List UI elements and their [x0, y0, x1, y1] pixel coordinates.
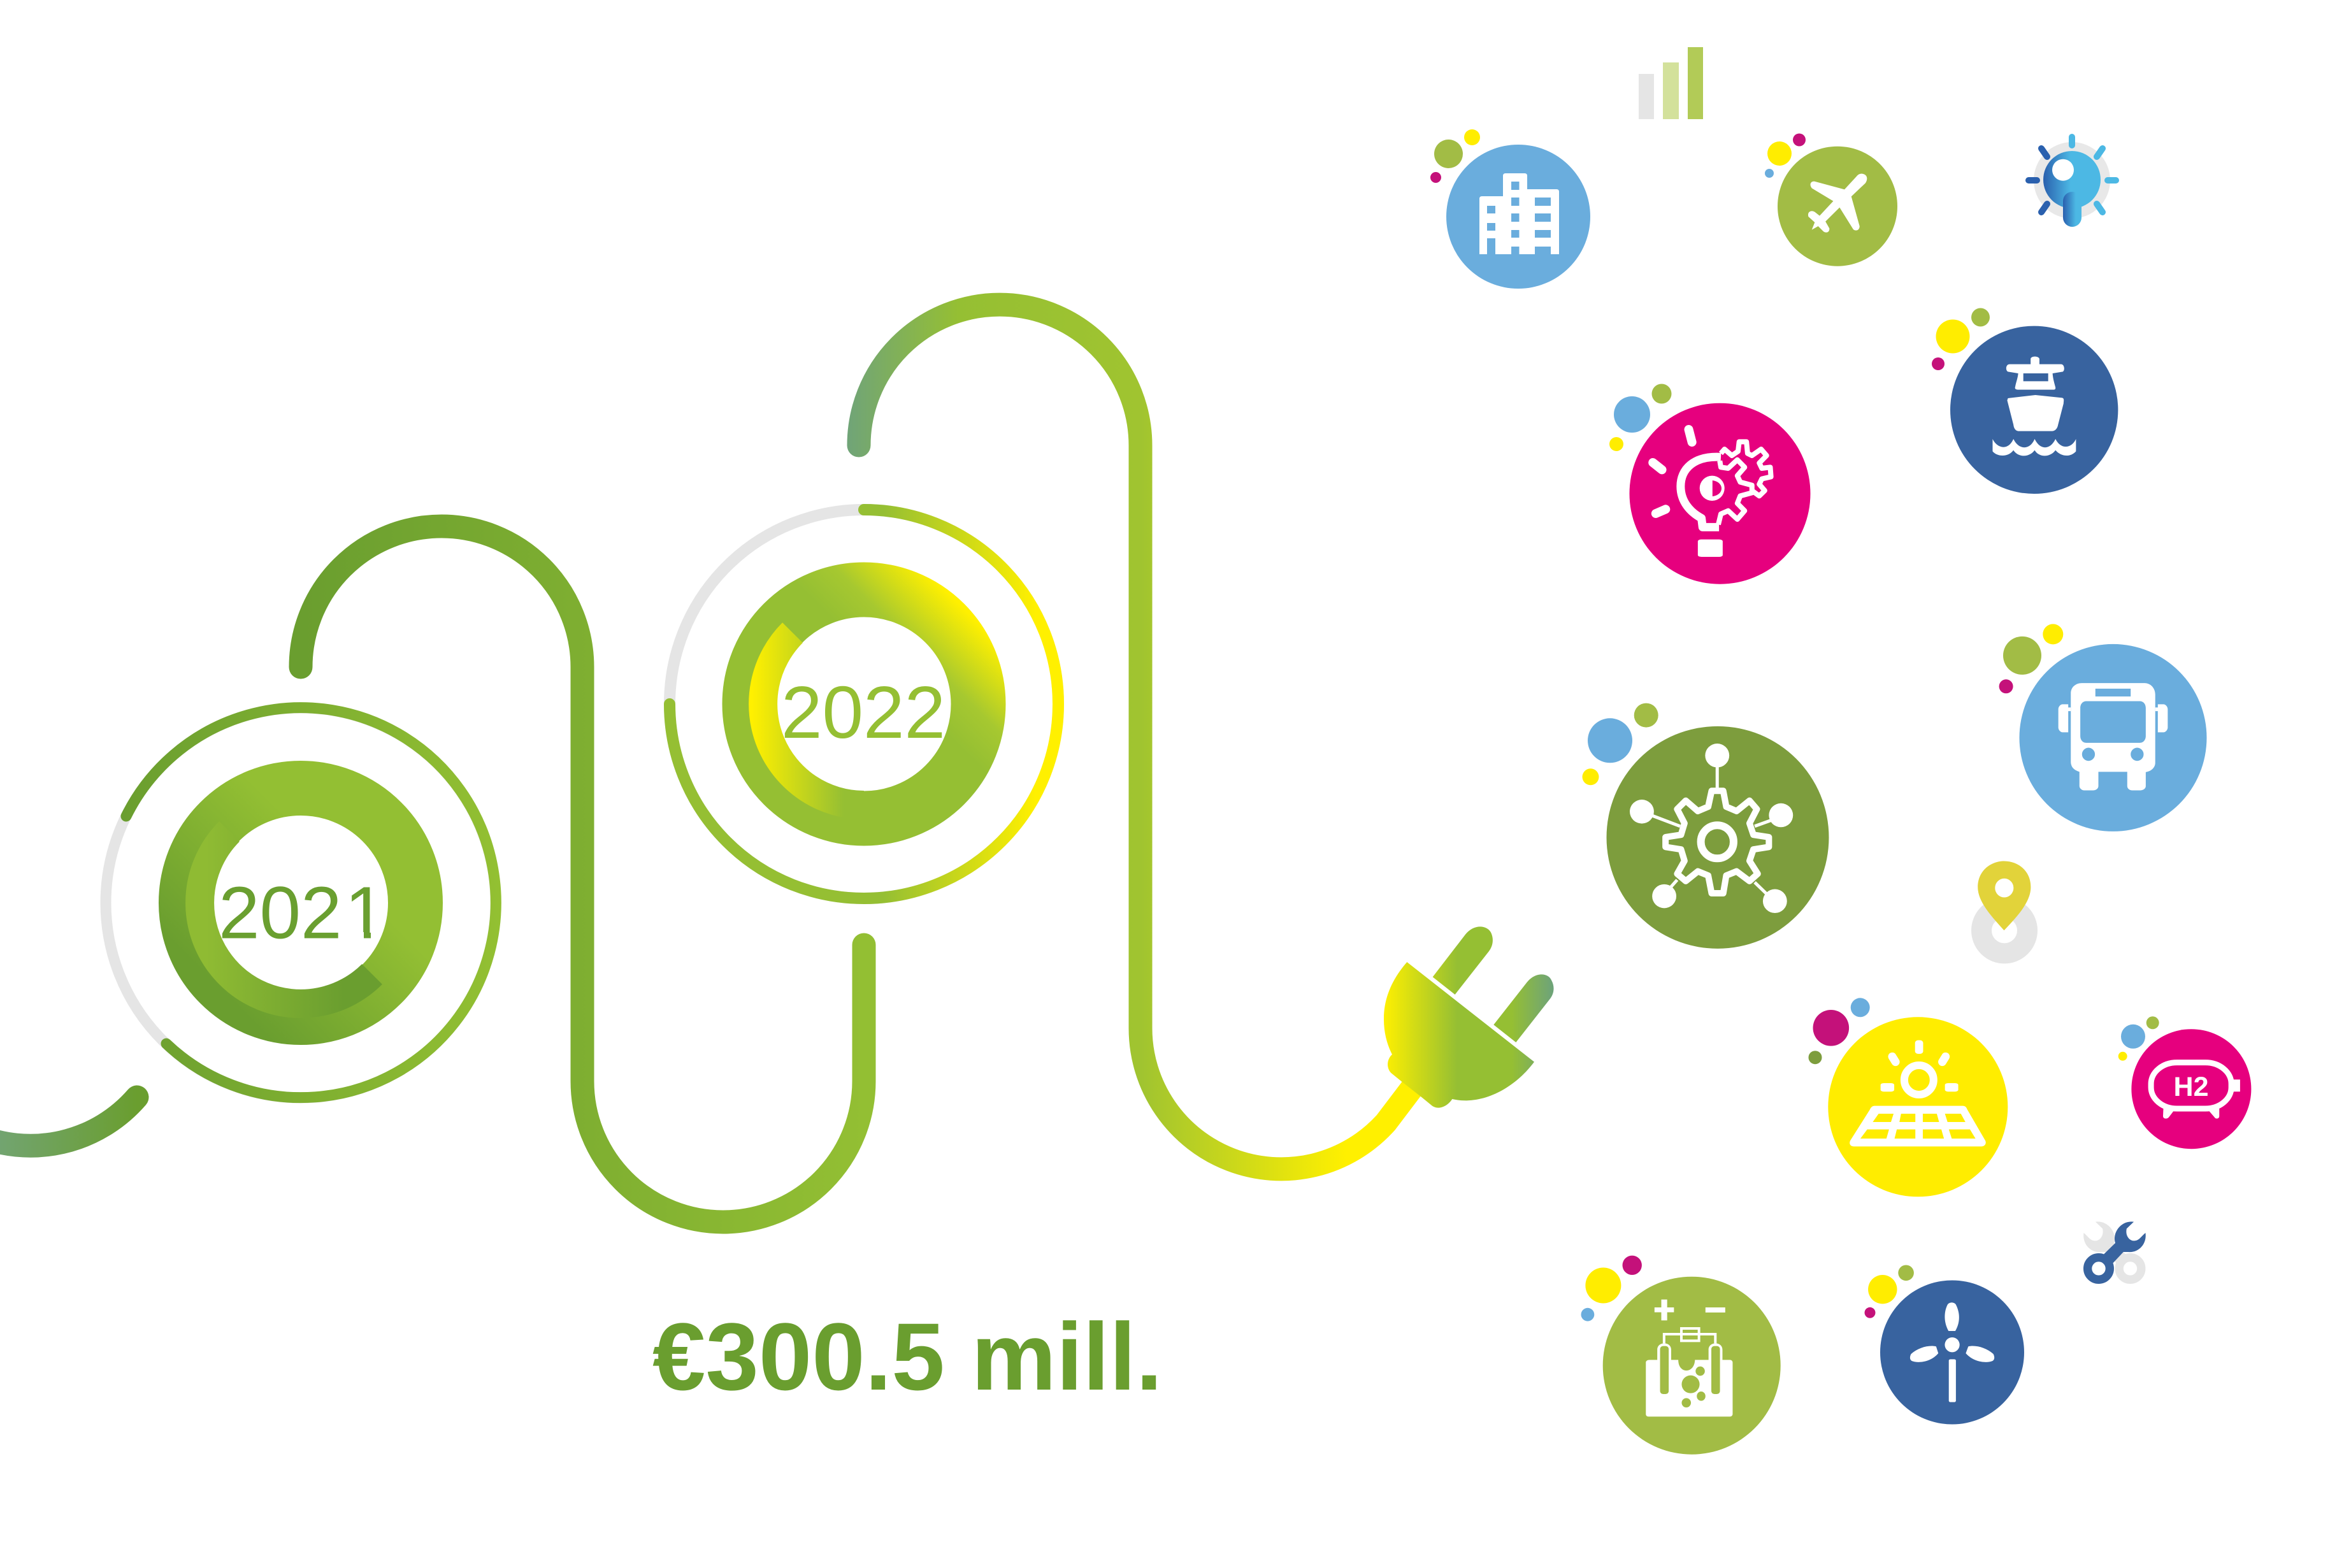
H2 label: H2	[2174, 1072, 2208, 1102]
icon: innovation bulb and gear	[1609, 384, 1811, 584]
icon: light bulb marker	[2029, 137, 2116, 227]
year label 2022: 2022	[781, 671, 945, 754]
icon: bus	[1999, 624, 2207, 831]
total amount: €300.5 mill.	[652, 1303, 1163, 1410]
icon: wind turbine	[1864, 1265, 2024, 1425]
icon: shipping	[1932, 308, 2118, 494]
icon: aviation	[1765, 134, 1897, 266]
cable segment: 2022 to plug	[859, 305, 1412, 1169]
icon: wrenches	[2083, 1221, 2146, 1279]
cable segment: 2021 to 2022	[301, 526, 864, 1222]
icon: solar panel	[1808, 998, 2008, 1197]
icon: bars	[1639, 47, 1703, 119]
icon: industry gear network	[1583, 703, 1829, 949]
plug	[1384, 926, 1554, 1108]
icon: hydrogen tank	[2118, 1016, 2251, 1149]
year marker: 2022	[670, 510, 1058, 898]
icon: battery electrolysis	[1581, 1256, 1781, 1455]
icon: buildings	[1430, 129, 1590, 289]
year marker: 2021	[106, 708, 496, 1098]
cable segment: left entry	[0, 1097, 137, 1146]
year label 2021: 2021	[219, 872, 386, 954]
icon: location pin	[1978, 861, 2031, 953]
